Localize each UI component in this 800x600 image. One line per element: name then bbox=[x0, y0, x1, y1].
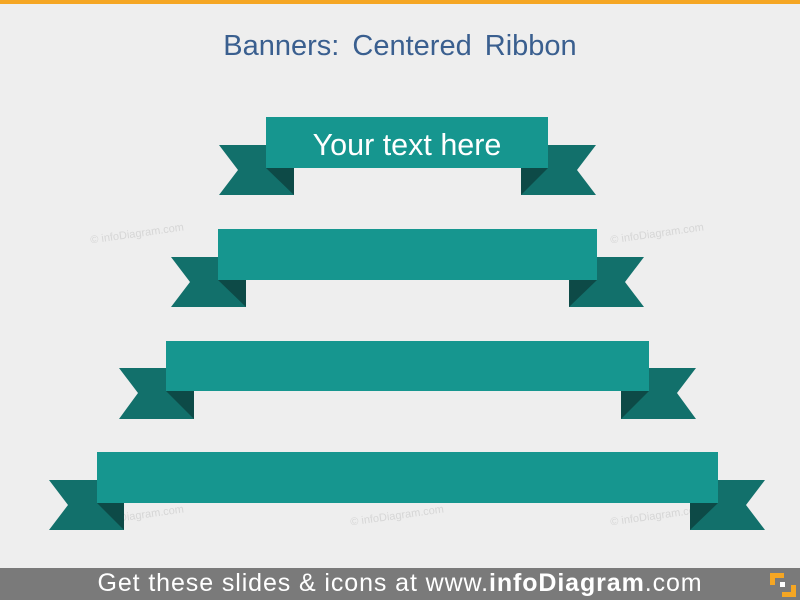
title: Banners: Centered Ribbon bbox=[223, 30, 577, 62]
ribbon 1: Your text here bbox=[313, 128, 501, 162]
text: © infoDiagram.com bbox=[610, 503, 705, 529]
ribbon 3 bbox=[119, 341, 696, 419]
text: © infoDiagram.com bbox=[350, 503, 445, 529]
icon: logo bbox=[770, 573, 796, 597]
ribbon 1 bbox=[219, 117, 596, 195]
ribbon 2 bbox=[171, 229, 644, 307]
ribbon 4 bbox=[49, 452, 765, 530]
text: © infoDiagram.com bbox=[90, 221, 185, 247]
text: © infoDiagram.com bbox=[90, 503, 185, 529]
footer bbox=[0, 568, 800, 600]
text: © infoDiagram.com bbox=[610, 221, 705, 247]
footer text: Get these slides & icons at www.infoDiagram.com bbox=[98, 569, 702, 597]
